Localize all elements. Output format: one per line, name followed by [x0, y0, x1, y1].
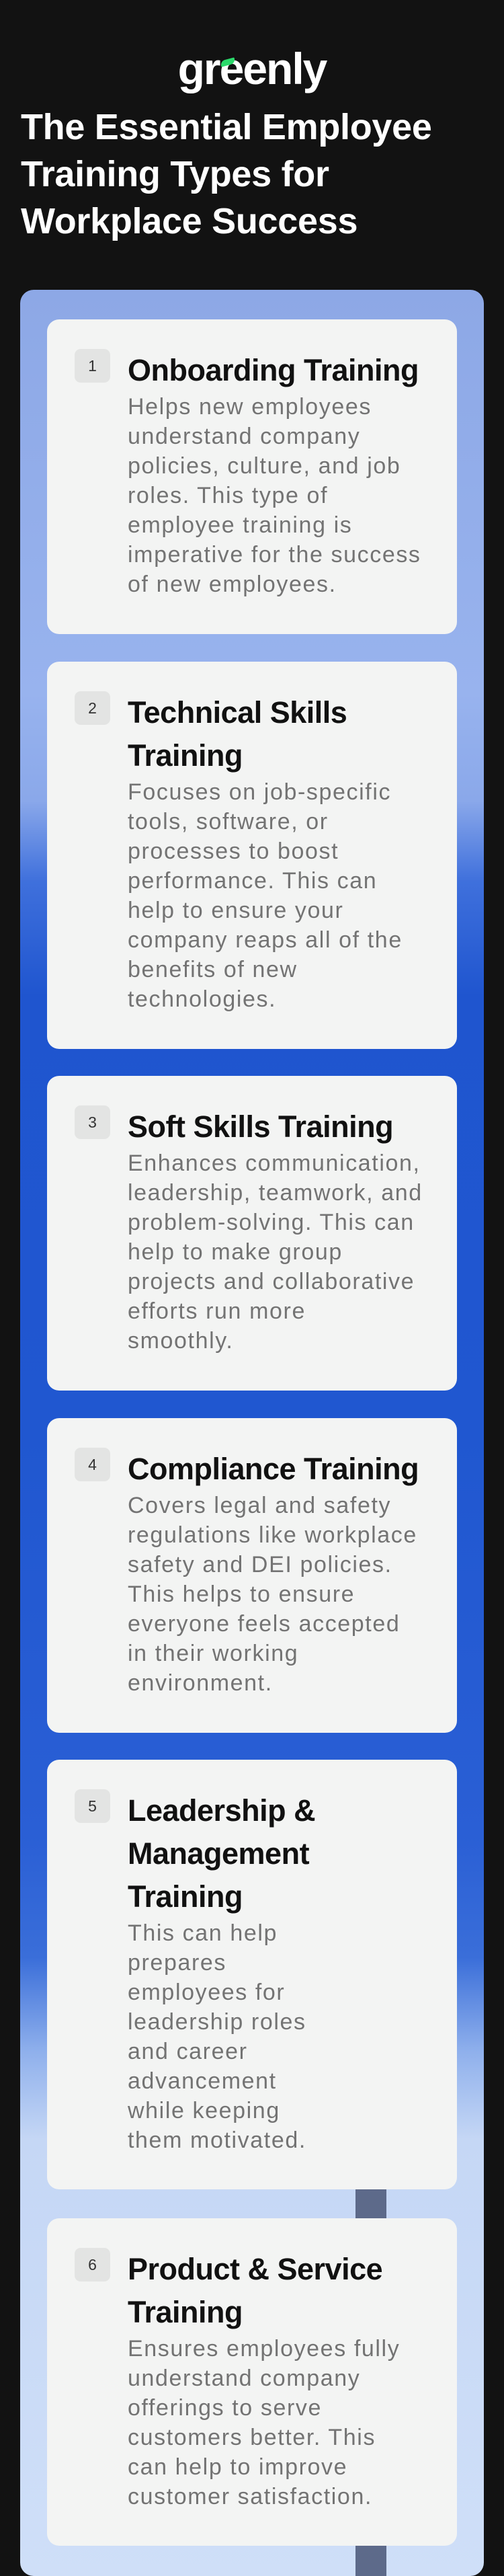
card 1 text: employee training is: [128, 512, 352, 538]
card 5 text: leadership roles: [128, 2009, 306, 2035]
card 3 text: leadership, teamwork, and: [128, 1180, 423, 1206]
card 4 text: in their working: [128, 1641, 298, 1666]
card 3 text: Soft Skills Training: [128, 1109, 393, 1144]
badge 1: 1: [88, 357, 97, 375]
card 2 text: processes to boost: [128, 838, 339, 864]
card 3 text: projects and collaborative: [128, 1269, 415, 1294]
badge 2: [75, 691, 110, 725]
badge 6: 6: [88, 2256, 97, 2273]
title: The Essential Employee: [21, 107, 432, 147]
card 6 text: [128, 2252, 400, 2509]
card 1 text: of new employees.: [128, 572, 337, 597]
card 2 text: help to ensure your: [128, 898, 343, 923]
card 3 text: Enhances communication,: [128, 1150, 421, 1176]
badge 3: 3: [88, 1114, 97, 1131]
card 4 text: environment.: [128, 1670, 273, 1696]
card 1 text: policies, culture, and job: [128, 453, 401, 479]
card 5 text: employees for: [128, 1980, 285, 2005]
badge 4: 4: [88, 1456, 97, 1473]
card 4 text: everyone feels accepted: [128, 1611, 400, 1637]
card 4 text: safety and DEI policies.: [128, 1552, 392, 1577]
title: [21, 107, 432, 241]
card 5 text: [128, 1793, 315, 2153]
card 5 text: and career: [128, 2039, 248, 2064]
card 1 text: roles. This type of: [128, 483, 328, 508]
badge 5: [75, 1789, 110, 1823]
logo: greenly: [178, 44, 326, 93]
card 2 text: benefits of new: [128, 957, 298, 982]
card 6 text: can help to improve: [128, 2454, 347, 2480]
card 5 text: advancement: [128, 2068, 277, 2094]
card 5 text: them motivated.: [128, 2128, 306, 2153]
badge 4: [75, 1448, 110, 1481]
card 2: [47, 662, 457, 1049]
card 1 text: imperative for the success: [128, 542, 421, 568]
card 4 text: [128, 1452, 419, 1696]
card 3 text: help to make group: [128, 1239, 343, 1265]
card 5 text: while keeping: [128, 2098, 280, 2123]
card 6 text: Training: [128, 2295, 243, 2329]
card 2 text: Focuses on job-specific: [128, 779, 391, 805]
card 5 text: Leadership &: [128, 1793, 315, 1828]
card 6 text: customers better. This: [128, 2425, 376, 2450]
card 6 text: understand company: [128, 2366, 360, 2391]
card 2 text: tools, software, or: [128, 809, 329, 834]
card 2 text: Training: [128, 738, 243, 773]
card 1 text: Onboarding Training: [128, 353, 419, 387]
card 4 text: regulations like workplace: [128, 1522, 417, 1548]
card 4 text: This helps to ensure: [128, 1582, 355, 1607]
pole: [355, 2189, 386, 2576]
card 2 text: [128, 695, 403, 1012]
card 2 text: technologies.: [128, 986, 276, 1012]
card 5 text: Training: [128, 1879, 243, 1914]
card 1 text: understand company: [128, 424, 360, 449]
card 2 text: performance. This can: [128, 868, 377, 894]
card 2 text: Technical Skills: [128, 695, 347, 730]
title: Training Types for: [21, 154, 329, 194]
card 3 text: smoothly.: [128, 1328, 233, 1354]
card 6: [47, 2218, 457, 2546]
card 6 text: Ensures employees fully: [128, 2336, 400, 2362]
card 5 text: Management: [128, 1836, 309, 1871]
card 1 text: [128, 353, 421, 597]
card 2 text: company reaps all of the: [128, 927, 403, 953]
badge 6: [75, 2248, 110, 2281]
card 1: [47, 319, 457, 634]
badge 1: [75, 349, 110, 383]
card 3 text: problem-solving. This can: [128, 1210, 415, 1235]
card 6 text: offerings to serve: [128, 2395, 322, 2421]
card 6 text: Product & Service: [128, 2252, 382, 2286]
card 5: [47, 1760, 457, 2189]
badge 2: 2: [88, 699, 97, 717]
card 1 text: Helps new employees: [128, 394, 372, 420]
card 5 text: This can help: [128, 1920, 278, 1946]
card 5 text: prepares: [128, 1950, 226, 1976]
card 6 text: customer satisfaction.: [128, 2484, 372, 2509]
card 4: [47, 1418, 457, 1733]
badge 3: [75, 1105, 110, 1139]
icon: leaf on logo: [220, 57, 236, 67]
card 4 text: Covers legal and safety: [128, 1493, 391, 1518]
card 3: [47, 1076, 457, 1391]
card 3 text: [128, 1109, 423, 1354]
badge 5: 5: [88, 1797, 97, 1815]
card 4 text: Compliance Training: [128, 1452, 419, 1486]
title: Workplace Success: [21, 201, 358, 241]
card 3 text: efforts run more: [128, 1298, 306, 1324]
